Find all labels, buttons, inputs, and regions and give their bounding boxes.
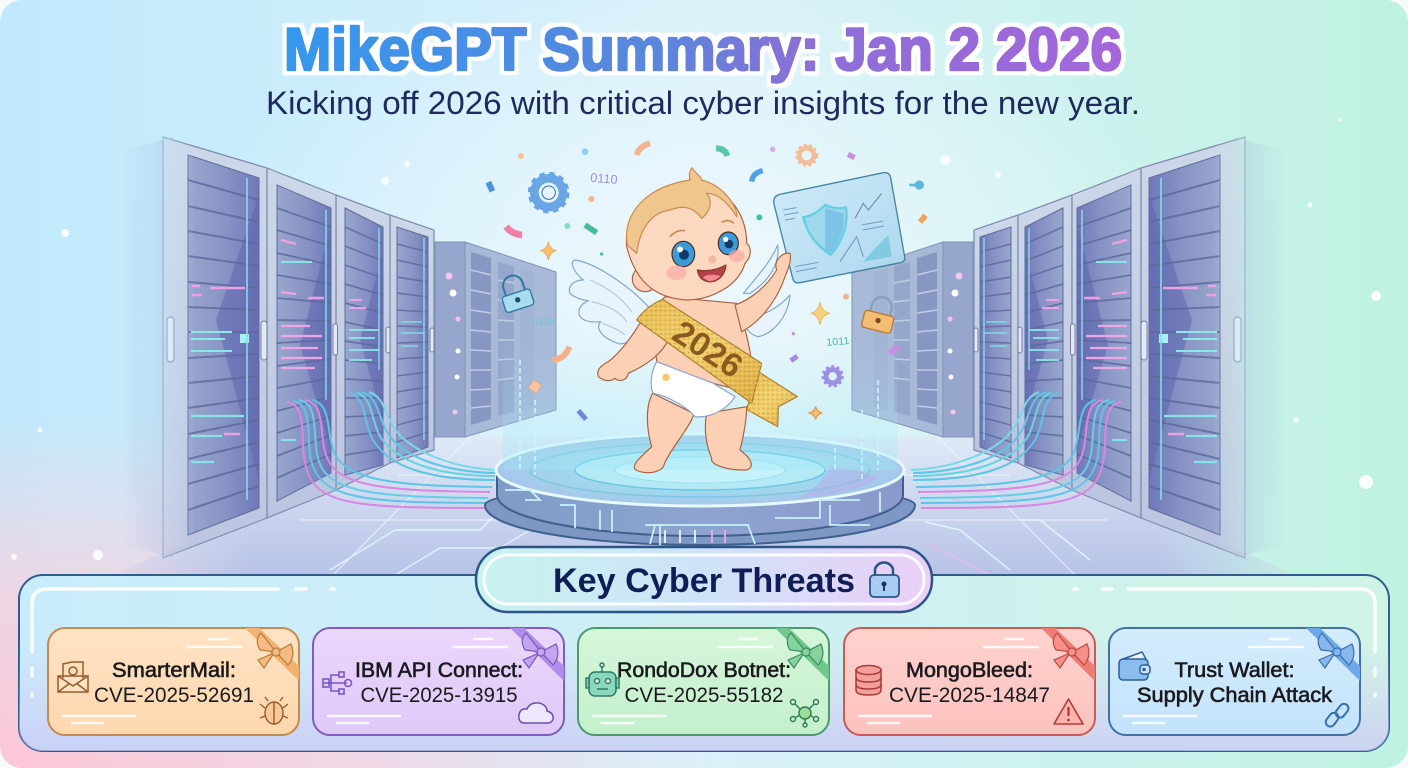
card text: SmarterMail: xyxy=(112,659,236,682)
holographic tablet xyxy=(774,173,905,283)
front leg xyxy=(634,393,693,473)
sash xyxy=(637,299,762,403)
icon: robot xyxy=(586,663,619,696)
hair xyxy=(627,168,737,253)
floor xyxy=(100,437,1308,580)
icon: cloud xyxy=(519,703,553,723)
platform side xyxy=(497,468,903,536)
panel: key cyber threats xyxy=(19,547,1389,751)
card: MongoBleed xyxy=(844,628,1095,735)
card: RondoDox Botnet: CVE-2025-55182 xyxy=(624,684,784,707)
subtitle: Kicking off 2026 with critical cyber insights for the new year. xyxy=(266,85,1140,121)
title: MikeGPT Summary: Jan 2 2026 xyxy=(284,16,1122,83)
card: Trust Wallet xyxy=(1109,628,1360,735)
network cables xyxy=(287,392,497,508)
icon: purple gear xyxy=(823,366,843,386)
ear xyxy=(632,266,658,292)
head xyxy=(626,182,750,300)
card text: MongoBleed: xyxy=(906,659,1033,682)
card: IBM API Connect xyxy=(313,628,564,735)
base disc xyxy=(485,486,915,545)
mouth xyxy=(697,265,726,282)
circuit details xyxy=(505,490,880,545)
icon: ribbon bow xyxy=(1318,633,1354,668)
card text: IBM API Connect: xyxy=(355,659,523,682)
icon: gold padlock xyxy=(861,294,898,334)
holographic light beams xyxy=(503,340,897,480)
icon: ribbon bow xyxy=(1053,633,1089,668)
icon: database xyxy=(856,666,881,695)
heading pill xyxy=(476,547,932,612)
icon: peach gear xyxy=(796,145,817,166)
icon: blue gear xyxy=(530,174,568,212)
card: Trust Wallet: Supply Chain Attack xyxy=(1137,684,1333,707)
right wing xyxy=(743,245,778,293)
cheeks and nose xyxy=(667,250,745,280)
icon: ribbon bow xyxy=(257,633,293,668)
icon: ribbon bow xyxy=(787,633,823,668)
brows xyxy=(670,221,734,237)
lower arm xyxy=(598,318,668,381)
icon: ribbon bow xyxy=(522,633,558,668)
left server racks with cables xyxy=(125,137,556,558)
icon: warning xyxy=(1054,699,1083,724)
card: MongoBleed: CVE-2025-14847 xyxy=(889,684,1050,707)
icon: blue padlock xyxy=(496,272,535,313)
heading text: Key Cyber Threats xyxy=(553,562,855,600)
binary text: 0110 faded: 0110 xyxy=(533,316,555,327)
binary text: 0110: 0110 xyxy=(590,171,618,187)
icon: heading padlock xyxy=(870,563,899,597)
confetti and small icons xyxy=(486,143,928,419)
sash glitter xyxy=(637,299,797,427)
rack C xyxy=(336,195,390,490)
icon: bug xyxy=(260,697,288,724)
sash label 2026: 2026 xyxy=(666,314,749,386)
platform top xyxy=(496,434,904,506)
binary text: 1011: 1011 xyxy=(826,335,850,349)
diaper xyxy=(651,362,735,417)
eye right xyxy=(718,232,738,255)
back server row xyxy=(435,242,556,437)
icon: usb xyxy=(323,672,352,694)
back leg xyxy=(705,407,751,470)
icon: envelope xyxy=(58,662,88,692)
baby angel xyxy=(569,168,797,473)
eye left xyxy=(672,241,695,267)
card: SmarterMail xyxy=(48,628,299,735)
card: RondoDox Botnet xyxy=(578,628,829,735)
bokeh sparkles xyxy=(11,118,1381,560)
ghost rack far left xyxy=(125,137,173,558)
raised arm xyxy=(735,253,790,332)
icon: wallet xyxy=(1119,652,1150,680)
floor circuit traces xyxy=(330,510,1090,575)
icon: network xyxy=(790,700,818,727)
card text: RondoDox Botnet: xyxy=(617,659,791,682)
torso xyxy=(654,297,754,393)
rack B xyxy=(267,168,338,518)
card: IBM API Connect: CVE-2025-13915 xyxy=(360,684,518,707)
holographic platform xyxy=(485,434,915,545)
rack A xyxy=(163,137,267,558)
left wing xyxy=(569,260,648,344)
icon: chain link xyxy=(1324,702,1350,728)
right server racks with cables xyxy=(852,137,1283,558)
sash tail xyxy=(747,372,797,427)
card text: Trust Wallet: xyxy=(1174,659,1294,682)
card: SmarterMail: CVE-2025-52691 xyxy=(94,684,254,707)
rack D xyxy=(390,215,434,463)
